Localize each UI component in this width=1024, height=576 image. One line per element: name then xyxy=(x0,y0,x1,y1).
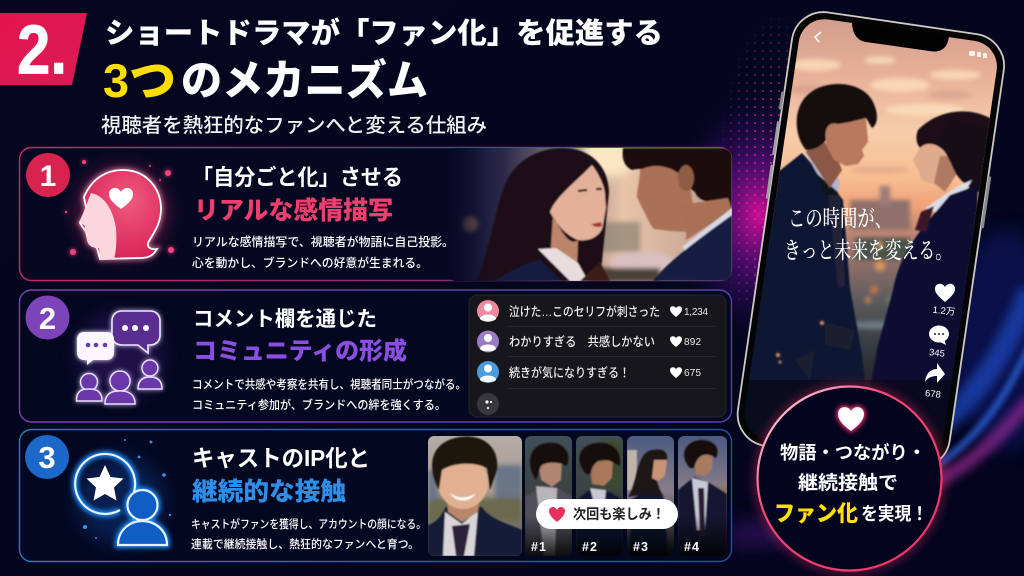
description 2: コミュニティ参加が、ブランドへの絆を強くする。 xyxy=(192,397,446,412)
more button xyxy=(477,393,499,415)
section number badge: 2. xyxy=(17,10,67,88)
comment row 2: 892 xyxy=(684,337,701,348)
number 3: 3 xyxy=(38,440,56,475)
description 3: キャストがファンを獲得し、アカウントの顔になる。 xyxy=(191,517,426,531)
description 1: リアルな感情描写で、視聴者が物語に自己投影。 xyxy=(192,234,454,249)
heading 2: コミュニティの形成 xyxy=(193,337,407,365)
panel 3: cast IP xyxy=(20,430,732,562)
heading 3: キャストのIP化と xyxy=(192,445,370,471)
comment row 1: 泣けた…このセリフが刺さった xyxy=(509,304,660,319)
title xyxy=(103,16,663,107)
section number badge xyxy=(0,10,87,88)
background xyxy=(696,11,1024,554)
phone overlay text xyxy=(784,205,952,263)
comment row 3: 続きが気になりすぎる！ xyxy=(509,365,630,380)
pill: see you next time: 次回も楽しみ！ xyxy=(573,506,665,522)
photo: thumbnail 4 xyxy=(678,436,727,556)
callout text: を実現！ xyxy=(861,504,928,524)
woman xyxy=(868,111,990,430)
title: 3つ xyxy=(103,54,176,107)
pill: see you next time xyxy=(536,499,678,529)
notch xyxy=(852,22,949,52)
subtitle: 視聴者を熱狂的なファンへと変える仕組み xyxy=(101,114,487,137)
phone body xyxy=(730,7,1011,473)
icon: star and person xyxy=(75,439,171,545)
icon: comment xyxy=(928,326,949,360)
comment row 2: わかりすぎる 共感しかない xyxy=(509,334,655,349)
heading 2 xyxy=(193,308,407,365)
heading 2: コメント欄を通じた xyxy=(193,308,377,331)
description 3 xyxy=(191,517,426,551)
callout text: 物語・つながり・ xyxy=(780,442,926,463)
callout circle xyxy=(754,382,946,574)
photo: thumbnail 2: #2 xyxy=(582,540,597,554)
comment row 3 xyxy=(477,361,701,383)
photo: thumbnail 4: #4 xyxy=(684,540,699,554)
callout text: ファン化 xyxy=(774,501,858,526)
description 1: 心を動かし、ブランドへの好意が生まれる。 xyxy=(192,255,428,270)
callout text: 継続接触で xyxy=(798,472,898,494)
photo: thumbnail 3 xyxy=(627,436,674,556)
description 2 xyxy=(192,376,466,412)
man xyxy=(744,83,878,438)
icon: share xyxy=(924,363,945,401)
comment row 3: 675 xyxy=(684,368,701,379)
phone screen photo xyxy=(744,19,997,446)
photo: couple close-up xyxy=(450,148,732,281)
icon: chat community xyxy=(76,311,162,404)
comment row 1: 1,234 xyxy=(684,307,708,318)
icon: like xyxy=(932,284,956,318)
callout text xyxy=(774,442,928,526)
comment row 2 xyxy=(477,330,701,352)
number 2: 2 xyxy=(39,301,56,336)
photo: smiling cast portrait xyxy=(428,436,522,556)
photo: thumbnail 1 xyxy=(525,436,572,556)
comment row 1 xyxy=(477,300,708,322)
heading 3: 継続的な接触 xyxy=(192,478,346,506)
title: ショートドラマが「ファン化」を促進する xyxy=(105,16,663,50)
photo: thumbnail 3: #3 xyxy=(633,540,648,554)
heading 1: リアルな感情描写 xyxy=(194,196,393,225)
icon: like: 1.2万 xyxy=(932,305,956,318)
comment list panel xyxy=(469,295,726,417)
title: のメカニズム xyxy=(181,57,428,104)
number 2 xyxy=(26,296,70,340)
icon: heart xyxy=(838,407,864,431)
heading 1: 「自分ごと化」させる xyxy=(192,165,403,190)
back arrow xyxy=(815,32,821,42)
phone mockup xyxy=(736,11,1005,460)
heading 3 xyxy=(192,445,370,506)
status icons xyxy=(969,51,987,58)
phone overlay text: きっと未来を変える。 xyxy=(784,237,952,263)
description 1 xyxy=(192,234,454,270)
photo: thumbnail 2 xyxy=(576,436,623,556)
icon: head with heart xyxy=(65,160,174,259)
description 3: 連載で継続接触し、熱狂的なファンへと育つ。 xyxy=(191,537,419,551)
icon: share: 678 xyxy=(924,388,941,401)
photo: thumbnail 1: #1 xyxy=(531,540,546,554)
heading 1 xyxy=(192,165,403,225)
phone overlay text: この時間が、 xyxy=(788,205,892,231)
number 1 xyxy=(26,153,70,197)
icon: comment: 345 xyxy=(928,347,945,360)
number 1: 1 xyxy=(40,160,56,193)
panel 2: community xyxy=(20,290,732,422)
description 2: コメントで共感や考察を共有し、視聴者同士がつながる。 xyxy=(192,376,466,392)
number 3 xyxy=(25,435,69,479)
panel 1: real emotion xyxy=(20,133,732,282)
